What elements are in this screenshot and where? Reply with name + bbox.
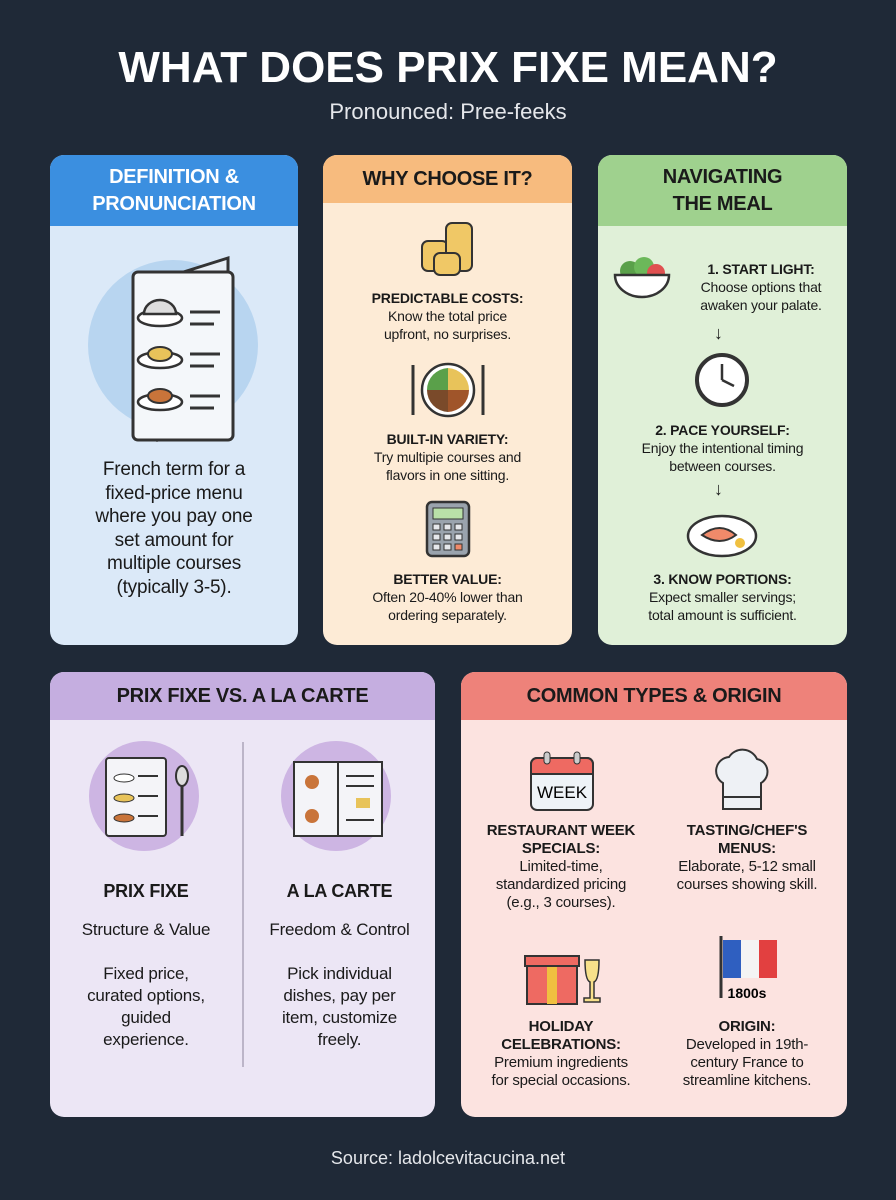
icon: a la carte menu bbox=[281, 741, 391, 851]
text: prix fixe bbox=[82, 881, 210, 1049]
icon: french flag bbox=[720, 936, 777, 1000]
subtitle: Pronounced: Pree-feeks bbox=[329, 99, 567, 124]
heading: navigating: THE MEAL bbox=[673, 192, 772, 214]
text: restaurant week: SPECIALS: bbox=[522, 840, 600, 857]
text: holiday bbox=[491, 1018, 630, 1089]
icon: prix fixe menu bbox=[89, 741, 199, 851]
text: holiday: CELEBRATIONS: bbox=[501, 1036, 621, 1053]
text: a la carte: Pick individual bbox=[287, 964, 392, 983]
text: tasting: courses showing skill. bbox=[677, 876, 817, 893]
icon: gift bbox=[524, 955, 601, 1005]
text: start light: 1. START LIGHT: bbox=[707, 261, 815, 277]
text: a la carte: Freedom & Control bbox=[269, 920, 410, 939]
text: restaurant week: RESTAURANT WEEK bbox=[487, 822, 635, 839]
source: Source: ladolcevitacucina.net bbox=[331, 1148, 565, 1168]
text: pace: between courses. bbox=[669, 458, 776, 474]
panel: navigating bbox=[598, 155, 847, 645]
text: prix fixe: guided bbox=[121, 1008, 171, 1027]
text: a la carte: freely. bbox=[318, 1030, 361, 1049]
text: variety: flavors in one sitting. bbox=[386, 467, 509, 483]
text: restaurant week: standardized pricing bbox=[496, 876, 626, 893]
text: tasting bbox=[677, 822, 817, 893]
text: predictable costs: upfront, no surprises. bbox=[384, 326, 511, 342]
text: restaurant week bbox=[487, 822, 636, 911]
heading: definition: PRONUNCIATION bbox=[92, 192, 256, 214]
text: predictable costs: Know the total price bbox=[388, 308, 507, 324]
text: pace: Enjoy the intentional timing bbox=[642, 440, 803, 456]
panel: definition bbox=[50, 155, 298, 645]
text: predictable costs bbox=[372, 290, 523, 342]
text: holiday: HOLIDAY bbox=[529, 1018, 593, 1035]
text: restaurant week: (e.g., 3 courses). bbox=[507, 894, 615, 911]
text: definition: fixed-price menu bbox=[105, 482, 243, 504]
heading: navigating bbox=[598, 155, 847, 226]
text: a la carte bbox=[269, 881, 410, 1049]
text: origin: century France to bbox=[690, 1054, 804, 1071]
text: portions bbox=[648, 571, 797, 623]
text: start light: awaken your palate. bbox=[700, 297, 822, 313]
icon: calculator bbox=[426, 500, 470, 558]
icon: fish plate bbox=[686, 514, 758, 558]
text: value: Often 20-40% lower than bbox=[372, 589, 523, 605]
text: start light: Choose options that bbox=[701, 279, 821, 295]
text: tasting: MENUS: bbox=[718, 840, 776, 857]
text: origin: ORIGIN: bbox=[719, 1018, 775, 1035]
text: prix fixe: Structure & Value bbox=[82, 920, 210, 939]
text: start light bbox=[700, 261, 822, 313]
icon: clock bbox=[695, 353, 749, 407]
text: portions: total amount is sufficient. bbox=[648, 607, 797, 623]
text: origin: streamline kitchens. bbox=[683, 1072, 811, 1089]
text: definition: set amount for bbox=[115, 530, 233, 550]
text: definition: French term for a bbox=[103, 459, 245, 480]
text: definition: (typically 3-5). bbox=[116, 576, 232, 598]
heading: vs bbox=[50, 672, 435, 720]
text: portions: 3. KNOW PORTIONS: bbox=[653, 571, 792, 587]
panel: why choose it bbox=[323, 155, 572, 645]
text: pace: 2. PACE YOURSELF: bbox=[655, 422, 790, 438]
text: tasting: TASTING/CHEF'S bbox=[687, 822, 807, 839]
text: holiday: Premium ingredients bbox=[494, 1054, 628, 1071]
heading: types bbox=[461, 672, 847, 720]
icon: chef hat bbox=[715, 748, 768, 810]
icon: coins bbox=[421, 222, 473, 276]
heading: definition: DEFINITION & bbox=[109, 166, 239, 188]
text: variety bbox=[374, 431, 521, 483]
panel: prix fixe vs a la carte bbox=[50, 672, 435, 1117]
heading: vs: PRIX FIXE VS. A LA CARTE bbox=[117, 684, 368, 706]
text: predictable costs: PREDICTABLE COSTS: bbox=[372, 290, 523, 306]
panel: common types bbox=[461, 672, 847, 1117]
heading: why bbox=[323, 155, 572, 203]
text: pace bbox=[642, 422, 803, 474]
icon: salad bbox=[614, 257, 670, 298]
text: a la carte: dishes, pay per bbox=[283, 986, 396, 1005]
heading: navigating: NAVIGATING bbox=[663, 166, 782, 188]
text: prix fixe: PRIX FIXE bbox=[103, 881, 189, 901]
icon: plate bbox=[412, 362, 484, 418]
text: value bbox=[372, 571, 523, 623]
text: a la carte: item, customize bbox=[282, 1008, 397, 1027]
text: restaurant week: Limited-time, bbox=[519, 858, 603, 875]
text: holiday: for special occasions. bbox=[491, 1072, 630, 1089]
text: value: ordering separately. bbox=[388, 607, 507, 623]
text: origin bbox=[683, 1018, 811, 1089]
text: definition: where you pay one bbox=[95, 506, 253, 527]
heading: why: WHY CHOOSE IT? bbox=[363, 168, 532, 190]
heading: types: COMMON TYPES & ORIGIN bbox=[527, 684, 781, 706]
arrow: ↓ bbox=[714, 323, 723, 343]
title: WHAT DOES PRIX FIXE MEAN? bbox=[118, 43, 778, 92]
text: prix fixe: Fixed price, bbox=[103, 964, 189, 983]
icon: calendar: WEEK bbox=[537, 783, 588, 802]
text: portions: Expect smaller servings; bbox=[649, 589, 796, 605]
text: variety: Try multipie courses and bbox=[374, 449, 521, 465]
text: value: BETTER VALUE: bbox=[393, 571, 502, 587]
text: definition: multiple courses bbox=[107, 553, 241, 574]
text: definition bbox=[95, 459, 253, 598]
text: prix fixe: curated options, bbox=[87, 986, 205, 1005]
icon: calendar bbox=[530, 752, 594, 811]
heading: definition bbox=[50, 155, 298, 226]
text: a la carte: A LA CARTE bbox=[287, 881, 392, 901]
text: tasting: Elaborate, 5-12 small bbox=[678, 858, 816, 875]
text: variety: BUILT-IN VARIETY: bbox=[387, 431, 508, 447]
text: origin: Developed in 19th- bbox=[686, 1036, 808, 1053]
icon: menu bbox=[88, 256, 258, 442]
arrow: ↓ bbox=[714, 479, 723, 499]
text: prix fixe: experience. bbox=[103, 1030, 189, 1049]
